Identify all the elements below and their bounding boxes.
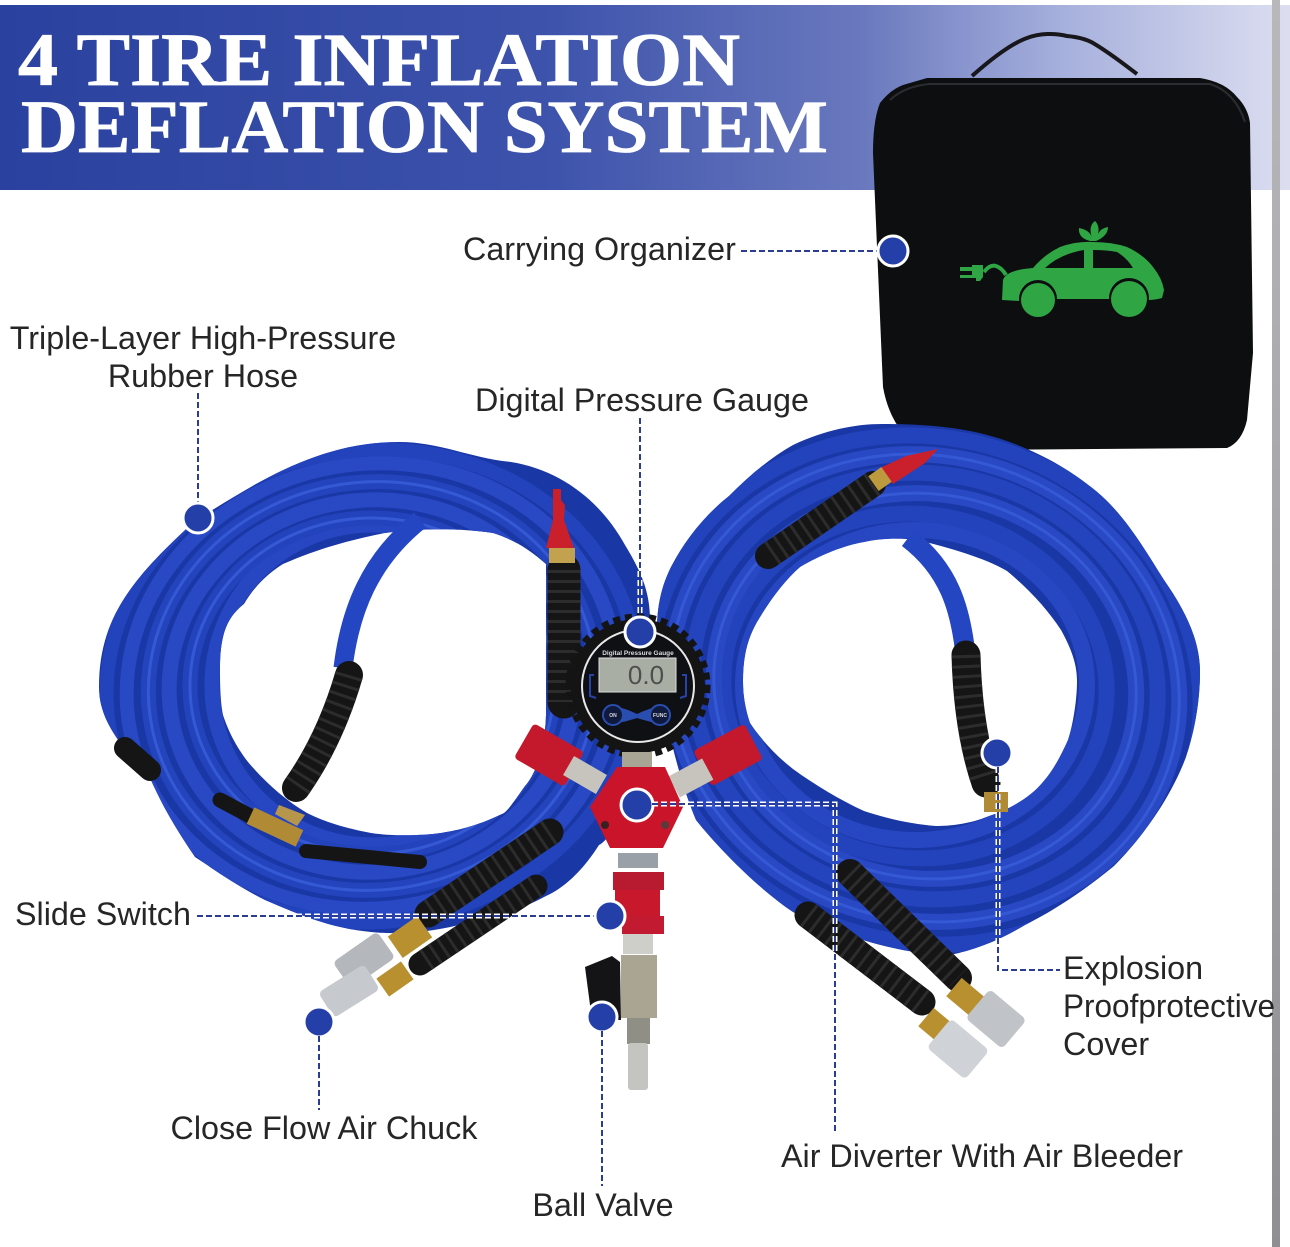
left hose coil	[99, 442, 650, 934]
callout: hose: Triple-Layer High-Pressure	[10, 320, 396, 356]
title: 4 TIRE INFLATION	[18, 19, 740, 102]
callout: carrying organizer: Carrying Organizer	[463, 231, 736, 267]
callout: digital gauge: Digital Pressure Gauge	[475, 382, 809, 418]
callout: protective cover: Proofprotective	[1063, 988, 1275, 1024]
close flow chucks, left	[318, 916, 432, 1018]
red diverter hexagon	[590, 767, 683, 848]
icon: green car logo	[960, 221, 1164, 318]
callout: air diverter	[621, 789, 1183, 1174]
callout: digital gauge	[475, 382, 809, 647]
hose end fittings	[247, 449, 1027, 1080]
callout: hose: Rubber Hose	[108, 358, 298, 394]
banner	[0, 5, 1290, 190]
callout: carrying organizer	[463, 231, 908, 267]
ball valve body	[621, 955, 657, 1018]
callout: ball valve	[532, 1002, 674, 1223]
close flow chucks, right	[918, 978, 1027, 1080]
callout: protective cover: Explosion	[1063, 950, 1203, 986]
callout: air chuck	[171, 1007, 478, 1146]
title: DEFLATION SYSTEM	[21, 86, 828, 169]
callout: hose	[10, 320, 396, 533]
callout: air diverter: Air Diverter With Air Bleeder	[781, 1138, 1183, 1174]
callout: slide switch	[15, 896, 625, 932]
black protective sleeves	[125, 484, 986, 1002]
callout: protective cover	[982, 738, 1275, 1062]
icon: digital pressure gauge: Digital Pressure Gauge	[602, 650, 674, 657]
callout: protective cover: Cover	[1063, 1026, 1149, 1062]
callout: slide switch: Slide Switch	[15, 896, 191, 932]
right edge bar	[1272, 0, 1280, 1247]
slide switch coupler	[613, 872, 664, 934]
right hose coil	[657, 424, 1200, 954]
callout: ball valve: Ball Valve	[532, 1187, 674, 1223]
red couplers	[514, 723, 763, 798]
callout: air chuck: Close Flow Air Chuck	[171, 1110, 478, 1146]
icon: digital pressure gauge: ON	[609, 713, 617, 719]
icon: digital pressure gauge: FUNC	[653, 713, 667, 719]
carrying bag	[873, 34, 1253, 450]
icon: digital pressure gauge: 0.0	[628, 660, 664, 690]
title	[18, 19, 828, 169]
icon: digital pressure gauge	[569, 617, 707, 755]
diverter manifold assembly	[514, 617, 763, 1090]
